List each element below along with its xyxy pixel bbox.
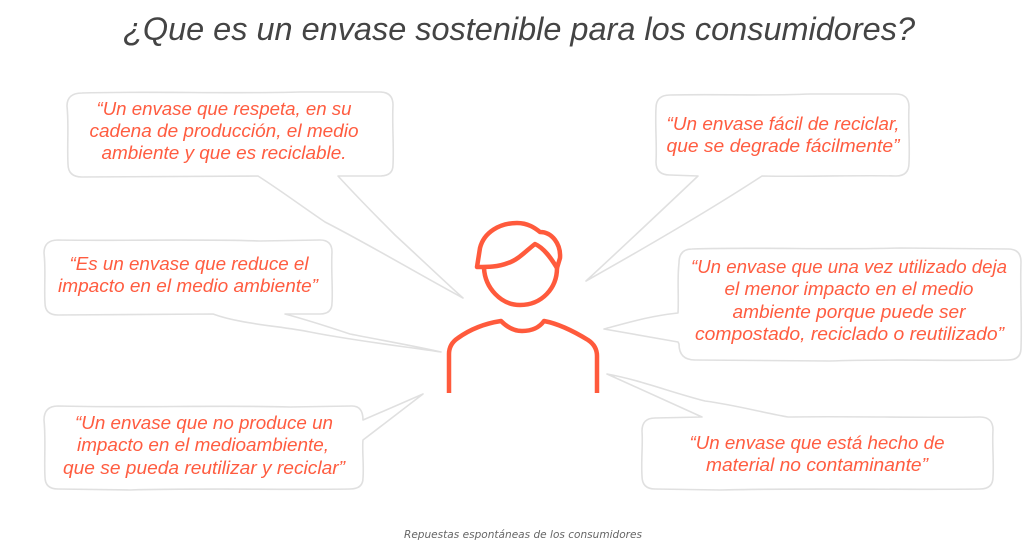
speech bubble: top left quote: cadena de producción, el medio bbox=[90, 120, 358, 141]
speech bubble: top left quote: “Un envase que respeta, en su bbox=[96, 98, 352, 119]
speech bubble: middle left quote: impacto en el medio ambiente” bbox=[58, 275, 319, 296]
speech bubble: bottom right quote bbox=[607, 374, 993, 490]
speech bubble: middle right quote: “Un envase que una vez utilizado deja bbox=[691, 256, 1007, 277]
icon: hair bbox=[477, 223, 560, 268]
speech bubble: top left quote bbox=[67, 92, 463, 298]
speech bubble: bottom left quote: que se pueda reutilizar y reciclar” bbox=[63, 457, 346, 478]
speech bubble: bottom right quote: material no contaminante” bbox=[706, 454, 929, 475]
speech bubble: middle right quote: ambiente porque puede ser bbox=[732, 301, 966, 322]
speech bubble: top right quote: “Un envase fácil de reciclar, bbox=[666, 113, 900, 134]
speech bubble: bottom left quote: “Un envase que no produce un bbox=[75, 412, 333, 433]
title: ¿Que es un envase sostenible para los consumidores? bbox=[123, 11, 915, 47]
footnote: Repuestas espontáneas de los consumidores bbox=[404, 529, 643, 541]
speech bubble: top right quote bbox=[586, 94, 909, 281]
speech bubble: middle left quote bbox=[44, 240, 441, 352]
speech bubble: top right quote: que se degrade fácilmente” bbox=[666, 135, 900, 156]
icon: head bbox=[484, 268, 557, 305]
speech bubble: middle left quote: “Es un envase que reduce el bbox=[70, 253, 309, 274]
speech bubble: bottom left quote bbox=[44, 394, 423, 490]
speech bubble: middle right quote: compostado, reciclado o reutilizado” bbox=[695, 323, 1005, 344]
speech bubble: bottom right quote: “Un envase que está hecho de bbox=[690, 432, 944, 453]
icon: person bbox=[449, 223, 597, 393]
speech bubble: middle right quote: el menor impacto en el medio bbox=[724, 278, 974, 299]
speech bubble: bottom left quote: impacto en el medioambiente, bbox=[77, 434, 329, 455]
speech bubble: top left quote: ambiente y que es reciclable. bbox=[102, 142, 346, 163]
icon: shoulders bbox=[449, 321, 597, 393]
speech bubble: middle right quote bbox=[604, 248, 1021, 361]
